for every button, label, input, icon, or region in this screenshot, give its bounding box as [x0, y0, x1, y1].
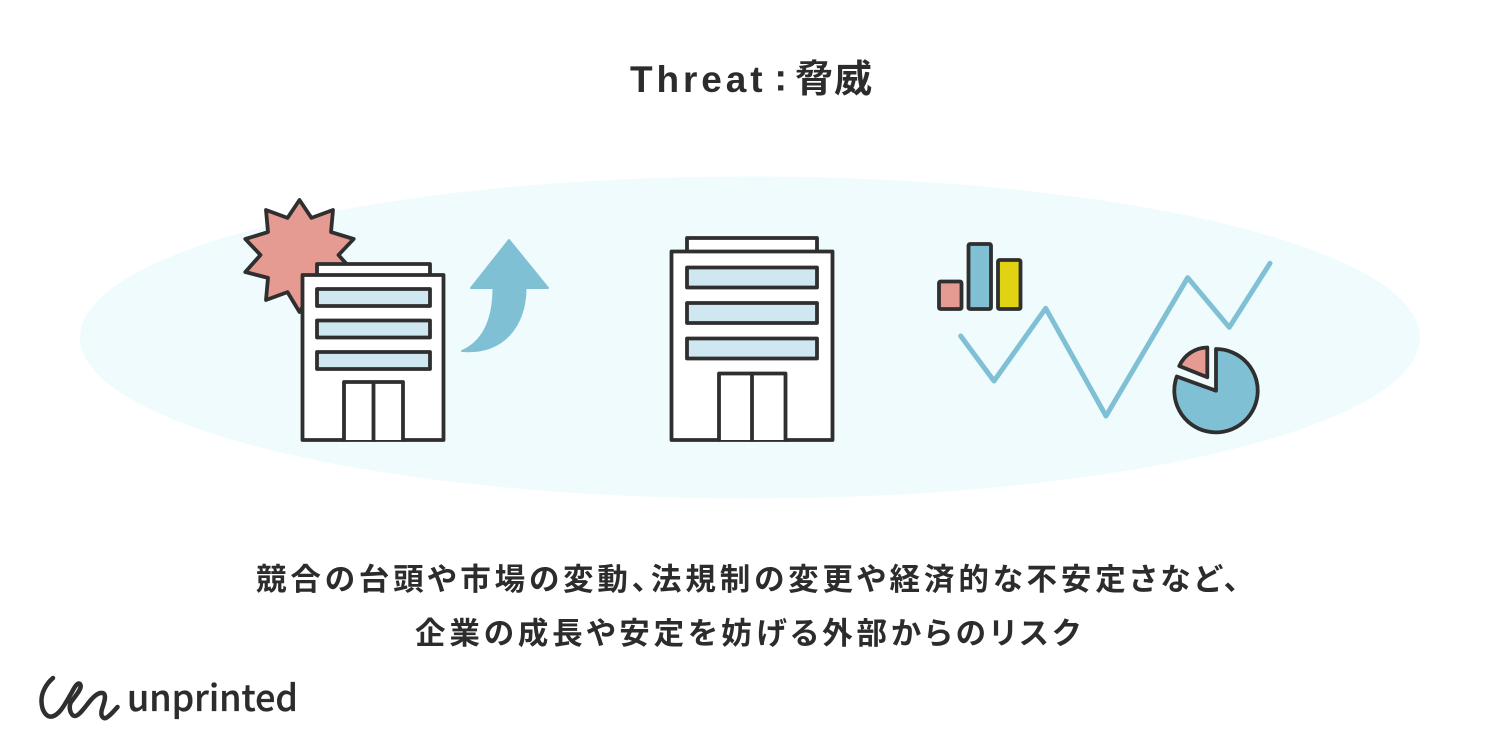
arrow: rising curved arrow [462, 240, 548, 351]
title: 脅威 [795, 48, 873, 103]
double door [719, 374, 786, 440]
icon: center building [672, 238, 832, 440]
double door [344, 382, 403, 440]
window row 1 [317, 289, 430, 306]
chart: bar icon [939, 244, 1020, 309]
building roof [317, 264, 430, 276]
chart: market line [961, 263, 1270, 416]
window row 3 [687, 338, 817, 358]
description line 1: 競合の台頭や市場の変動、法規制の変更や経済的な不安定さなど、 [256, 555, 1243, 599]
bar: blue [968, 244, 991, 309]
pie: large slice [1174, 349, 1258, 432]
title: : [774, 58, 787, 100]
description text [256, 555, 1243, 653]
pie: small slice [1179, 348, 1207, 377]
window row 2 [317, 320, 430, 338]
window row 1 [687, 268, 817, 288]
bar: yellow [998, 260, 1020, 309]
icon: left building with burst [245, 200, 444, 440]
icon: burst star [245, 200, 354, 312]
logo: unprinted [41, 669, 298, 722]
chart: pie icon [1174, 348, 1258, 432]
window row 2 [687, 303, 817, 323]
background ellipse [80, 176, 1420, 498]
building roof [687, 238, 817, 253]
building body [672, 252, 832, 440]
logo script mark [41, 678, 117, 718]
building body [302, 275, 444, 440]
logo wordmark: unprinted [127, 669, 298, 722]
description line 2: 企業の成長や安定を妨げる外部からのリスク [415, 609, 1084, 653]
title: Threat [630, 59, 766, 100]
window row 3 [317, 352, 430, 369]
bar: pink [939, 282, 962, 309]
